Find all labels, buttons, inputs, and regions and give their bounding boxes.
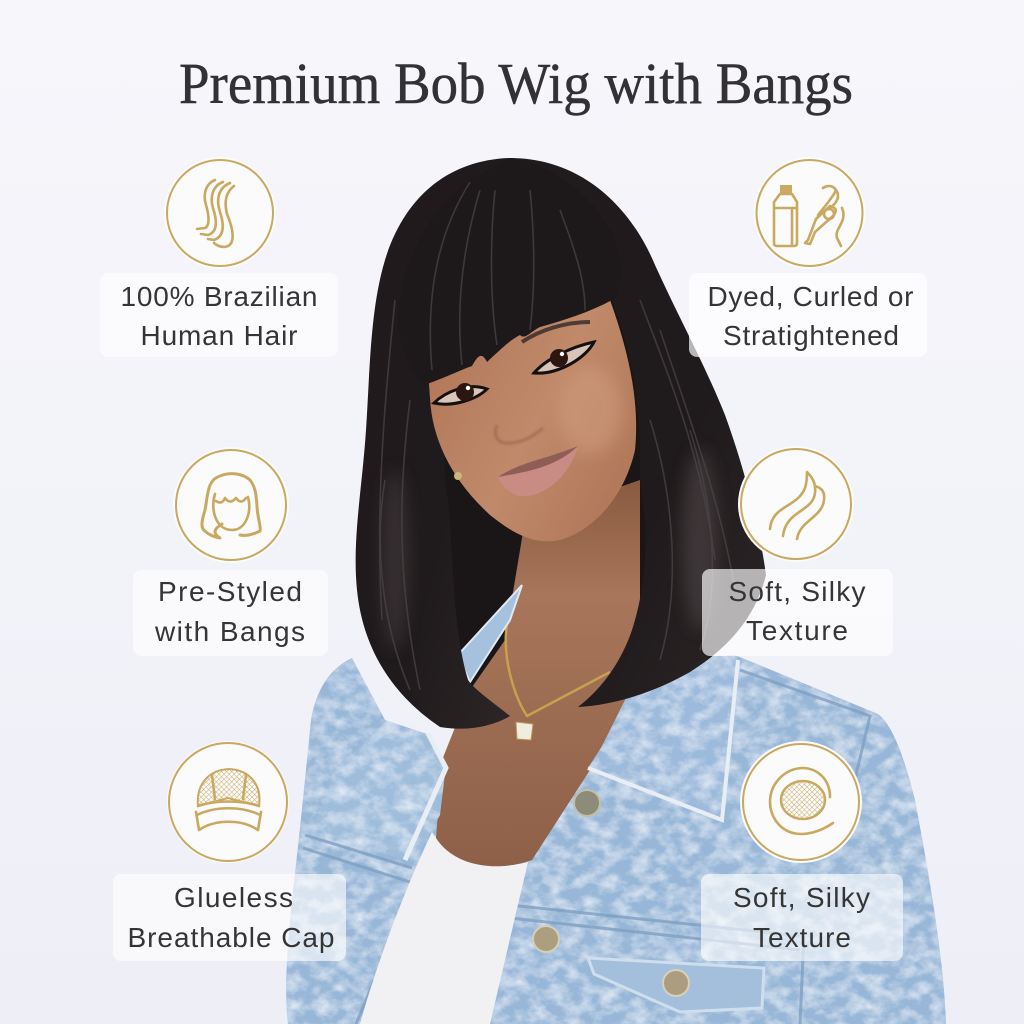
feature: Glueless Breathable Cap <box>113 741 346 961</box>
neck and chest <box>436 480 640 866</box>
label panel: Breathable Cap <box>128 922 334 953</box>
label panel: with Bangs <box>154 616 305 647</box>
right jacket collar <box>588 660 738 820</box>
feature: Soft, Silky Texture (upper) <box>702 446 893 656</box>
lips <box>498 446 578 496</box>
title: Premium Bob Wig with Bangs <box>179 51 853 116</box>
hair behind neck <box>425 290 650 700</box>
feature: Soft, Silky Texture (lower) <box>701 741 903 961</box>
label panel <box>701 874 903 961</box>
right eye <box>534 342 594 373</box>
label panel: Pre-Styled <box>158 576 302 607</box>
cheek highlight <box>558 366 622 454</box>
nose <box>495 425 543 443</box>
label panel: Texture <box>753 922 851 953</box>
jacket buttons <box>533 790 689 996</box>
portrait of woman wearing bob wig <box>286 158 946 1024</box>
jacket seams and stitching <box>303 670 870 1024</box>
label panel: Texture <box>746 615 848 646</box>
label panel: 100% Brazilian <box>120 281 318 312</box>
label panel <box>113 874 346 961</box>
left eye <box>434 383 487 404</box>
denim jacket <box>286 655 946 1024</box>
feature: 100% Brazilian Human Hair <box>100 157 338 357</box>
feature: Pre-Styled with Bangs <box>133 447 328 656</box>
icon: hair spiral with mesh <box>740 741 862 863</box>
icon: silky waves <box>738 446 854 562</box>
label panel: Dyed, Curled or <box>708 281 914 312</box>
label panel: Stratightened <box>723 320 899 351</box>
bangs <box>398 158 622 385</box>
icon: bottle and hair dryer <box>754 157 866 269</box>
label panel <box>702 569 893 656</box>
white shirt <box>360 832 528 1024</box>
hair strands and highlights <box>380 182 735 690</box>
label panel: Soft, Silky <box>733 882 870 913</box>
label panel <box>689 273 927 357</box>
icon: bob hairstyle head <box>173 447 289 563</box>
label panel: Human Hair <box>140 320 298 351</box>
hair: long side locks <box>356 158 766 729</box>
left jacket collar <box>310 585 522 860</box>
icon: wig cap <box>167 741 289 863</box>
necklace <box>506 606 610 740</box>
feature: Dyed, Curled or Straightened <box>689 157 927 357</box>
soft sheen on the side locks <box>381 470 409 650</box>
icon: hair strands <box>164 157 276 269</box>
label panel <box>100 273 338 357</box>
label panel <box>133 570 328 656</box>
label panel: Glueless <box>174 882 293 913</box>
eyebrow <box>522 322 590 342</box>
label panel: Soft, Silky <box>728 576 866 607</box>
jacket pocket <box>588 958 764 1012</box>
earring <box>454 472 462 480</box>
face <box>428 300 636 541</box>
